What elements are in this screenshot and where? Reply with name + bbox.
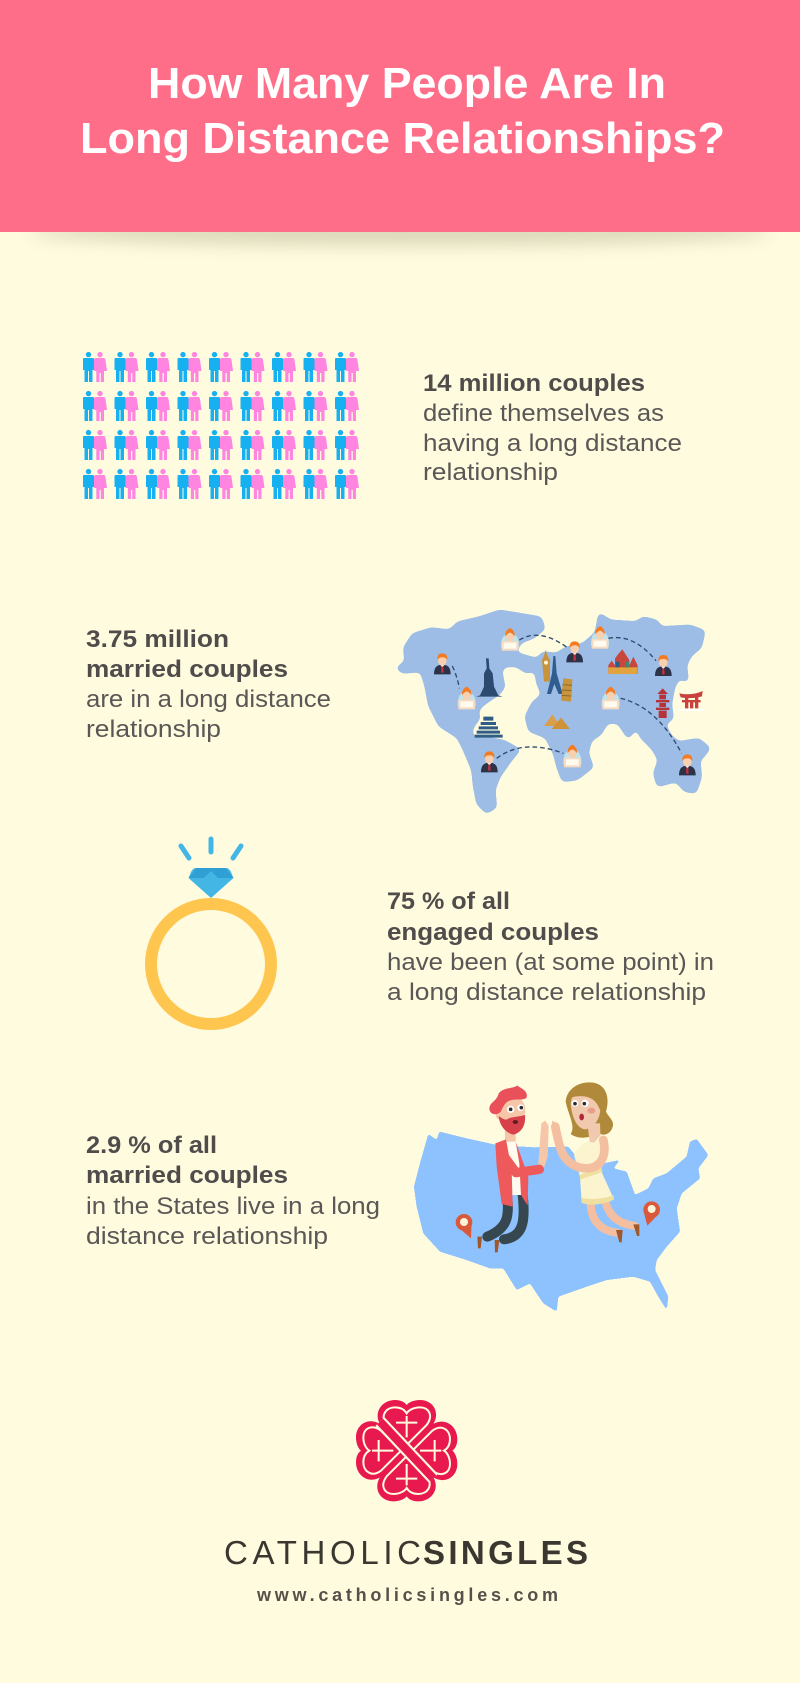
- jacket: [495, 1139, 528, 1207]
- text block: 75% engaged couples: 75 % of all: [387, 888, 510, 915]
- landmark: eiffel tower: [547, 656, 563, 694]
- icon: diamond ring: [151, 839, 271, 1024]
- head: [500, 1096, 525, 1124]
- routes: dashed lines: [452, 635, 682, 758]
- blush: [587, 1108, 595, 1114]
- logo wordmark: SINGLES: [423, 1534, 588, 1571]
- world map illustration: [398, 612, 708, 812]
- text block: 75% engaged couples: engaged couples: [387, 919, 599, 946]
- text block: 2.9% married couples: [86, 1132, 380, 1250]
- landmark: kremlin: [608, 649, 638, 674]
- title: [80, 59, 725, 163]
- woman figure: [551, 1082, 639, 1242]
- text block: 75% engaged couples: have been (at some point) in: [387, 949, 714, 976]
- hair front: [572, 1087, 607, 1110]
- neck: [587, 1123, 601, 1144]
- landmark: big ben: [542, 650, 550, 682]
- landmark: leaning tower: [561, 678, 572, 702]
- man figure: [477, 1085, 549, 1252]
- people: grooms: [434, 641, 696, 775]
- pin: west: [456, 1214, 472, 1238]
- diamond: [188, 868, 234, 898]
- text block: 14 million couples: having a long distance: [423, 430, 682, 457]
- back hair: [566, 1082, 613, 1138]
- logo mark: [356, 1400, 457, 1501]
- text block: 14 million couples: relationship: [423, 459, 558, 486]
- hair: [489, 1085, 527, 1114]
- logo wordmark: CATHOLIC: [224, 1534, 421, 1571]
- legs: [591, 1200, 635, 1233]
- eyes: [507, 1106, 514, 1113]
- face: [571, 1093, 600, 1129]
- map: USA: [414, 1132, 708, 1312]
- ear: [496, 1111, 503, 1119]
- text block: 75% engaged couples: a long distance relationship: [387, 979, 706, 1006]
- shoes: [477, 1237, 499, 1252]
- USA map illustration with couple: [414, 1082, 708, 1312]
- mouth: [579, 1114, 584, 1120]
- trousers: [487, 1195, 524, 1239]
- text block: 3.75 million married couples: relationship: [86, 716, 221, 743]
- website url: www.catholicsingles.com: [256, 1585, 558, 1605]
- landmark: pyramids: [544, 714, 570, 729]
- pin: east: [643, 1201, 660, 1226]
- arm: [555, 1127, 604, 1168]
- ring band: [151, 904, 271, 1024]
- text block: 14 million couples: [423, 370, 682, 486]
- text block: 3.75 million married couples: 3.75 million: [86, 626, 229, 653]
- logo wordmark: [224, 1534, 588, 1571]
- text block: 3.75 million married couples: are in a long distance: [86, 686, 331, 713]
- four heart clover: [356, 1400, 457, 1501]
- diagonal ribbon: [380, 1422, 433, 1478]
- text block: 3.75 million married couples: [86, 626, 331, 743]
- mouth: [513, 1120, 518, 1124]
- hand: [538, 1121, 549, 1170]
- sleeve: [501, 1152, 539, 1173]
- beard: [499, 1115, 525, 1135]
- text block: 2.9% married couples: married couples: [86, 1162, 288, 1189]
- landmark: stepped pyramid: [475, 717, 503, 738]
- sparkle rays: [181, 839, 241, 858]
- header shadow: [30, 218, 770, 246]
- title: Long Distance Relationships?: [80, 114, 725, 163]
- landmark: statue of liberty: [476, 658, 503, 697]
- landmark: torii gate: [679, 691, 705, 711]
- text block: 14 million couples: 14 million couples: [423, 370, 645, 397]
- people: brides: [458, 626, 620, 767]
- title: How Many People Are In: [148, 59, 666, 108]
- eyes: [572, 1100, 578, 1107]
- shoes: [616, 1224, 639, 1242]
- header banner: [0, 0, 800, 232]
- text block: 2.9% married couples: in the States live in a long: [86, 1193, 380, 1220]
- text block: 14 million couples: define themselves as: [423, 400, 664, 427]
- text block: 75% engaged couples: [387, 888, 714, 1006]
- text block: 3.75 million married couples: married couples: [86, 656, 288, 683]
- landmark: pagoda: [656, 688, 669, 718]
- pictogram: grid of couples: [83, 352, 359, 499]
- text block: 2.9% married couples: 2.9 % of all: [86, 1132, 217, 1159]
- text block: 2.9% married couples: distance relationship: [86, 1223, 328, 1250]
- neck: [505, 1123, 516, 1143]
- dress: [574, 1134, 614, 1204]
- map: continents: [398, 612, 708, 812]
- shirt: [504, 1142, 523, 1195]
